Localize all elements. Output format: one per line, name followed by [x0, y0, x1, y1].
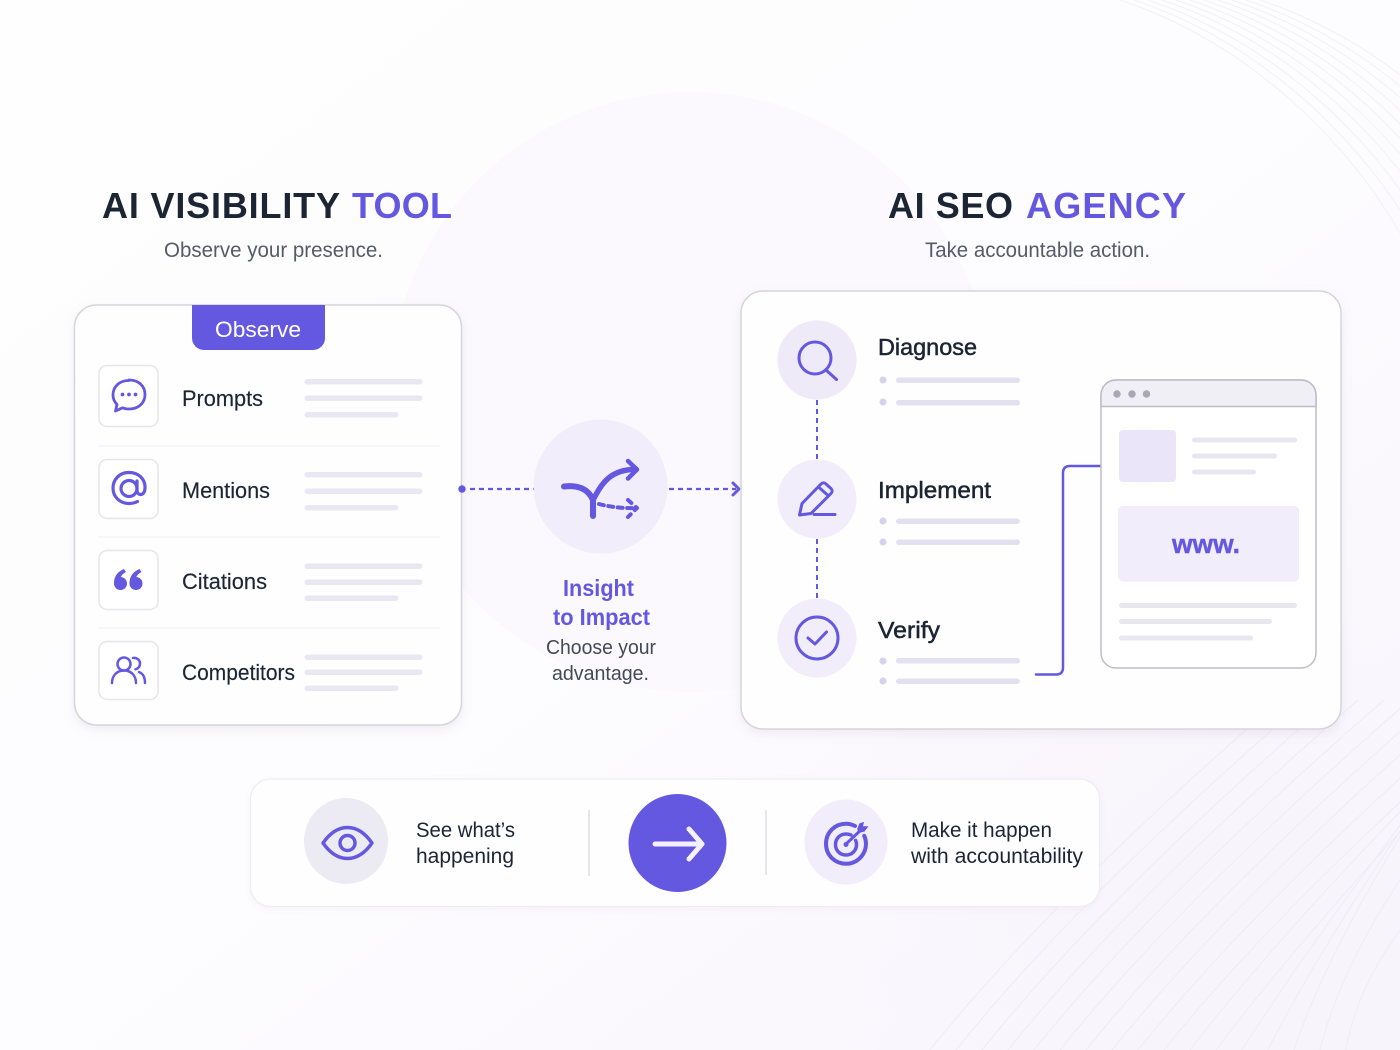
icon: pencil — [800, 483, 835, 515]
tab: Observe: Observe — [215, 317, 301, 342]
title: AI Visibility Tool: TOOL — [352, 185, 452, 226]
subtitle: action: Take accountable action. — [925, 239, 1150, 262]
row: prompts — [99, 366, 422, 426]
text: insight to impact: Insight — [563, 575, 634, 601]
arrow: left connector — [458, 485, 534, 493]
text: insight to impact: to Impact — [553, 604, 650, 630]
tab: Observe — [192, 305, 325, 350]
text: insight to impact — [546, 575, 656, 685]
step: diagnose — [778, 320, 1020, 406]
icon: target — [804, 800, 888, 884]
text: insight to impact: advantage. — [552, 663, 649, 685]
row: citations: Citations — [182, 569, 267, 594]
text: see what's happening: happening — [416, 845, 514, 868]
icon: quotation marks — [114, 569, 142, 590]
icon: people — [112, 658, 145, 683]
step: implement — [778, 460, 1020, 546]
text: make it happen — [910, 819, 1084, 868]
icon: magnifier — [799, 342, 836, 380]
arrow: connector to browser — [1036, 466, 1101, 674]
subtitle: observe: Observe your presence. — [164, 239, 383, 262]
panel: agency card — [741, 291, 1341, 729]
title: AI Visibility Tool — [102, 185, 452, 226]
row: citations — [99, 550, 422, 610]
text: see what's happening: See what’s — [416, 819, 515, 842]
step: diagnose: Diagnose — [878, 334, 977, 360]
row: competitors — [99, 642, 422, 700]
icon: speech bubble — [113, 380, 145, 411]
panel: observe card — [74, 305, 462, 725]
icon: insight to impact fork — [534, 420, 668, 554]
title: AI SEO Agency — [888, 185, 1186, 226]
title: AI Visibility Tool: AI VISIBILITY — [102, 185, 340, 226]
row: mentions: Mentions — [182, 478, 270, 503]
text: www: www. — [1171, 529, 1240, 559]
title: AI SEO Agency: AGENCY — [1026, 185, 1186, 226]
text: see what's happening — [416, 819, 515, 868]
step: verify: Verify — [878, 617, 941, 643]
step: verify — [778, 598, 1020, 684]
icon: check circle — [796, 617, 838, 659]
icon: eye — [304, 798, 388, 884]
arrow: right connector — [669, 483, 739, 495]
text: insight to impact: Choose your — [546, 637, 656, 659]
icon: at sign — [113, 472, 145, 504]
text: make it happen: Make it happen — [911, 819, 1052, 842]
panel: bottom summary bar — [250, 779, 1100, 906]
row: competitors: Competitors — [182, 660, 295, 685]
row: mentions — [99, 460, 422, 518]
text: make it happen: with accountability — [910, 845, 1084, 868]
step: implement: Implement — [878, 477, 992, 503]
row: prompts: Prompts — [182, 386, 263, 411]
icon: arrow button — [628, 794, 726, 892]
title: AI SEO Agency: AI SEO — [888, 185, 1013, 226]
browser window — [1101, 380, 1316, 668]
